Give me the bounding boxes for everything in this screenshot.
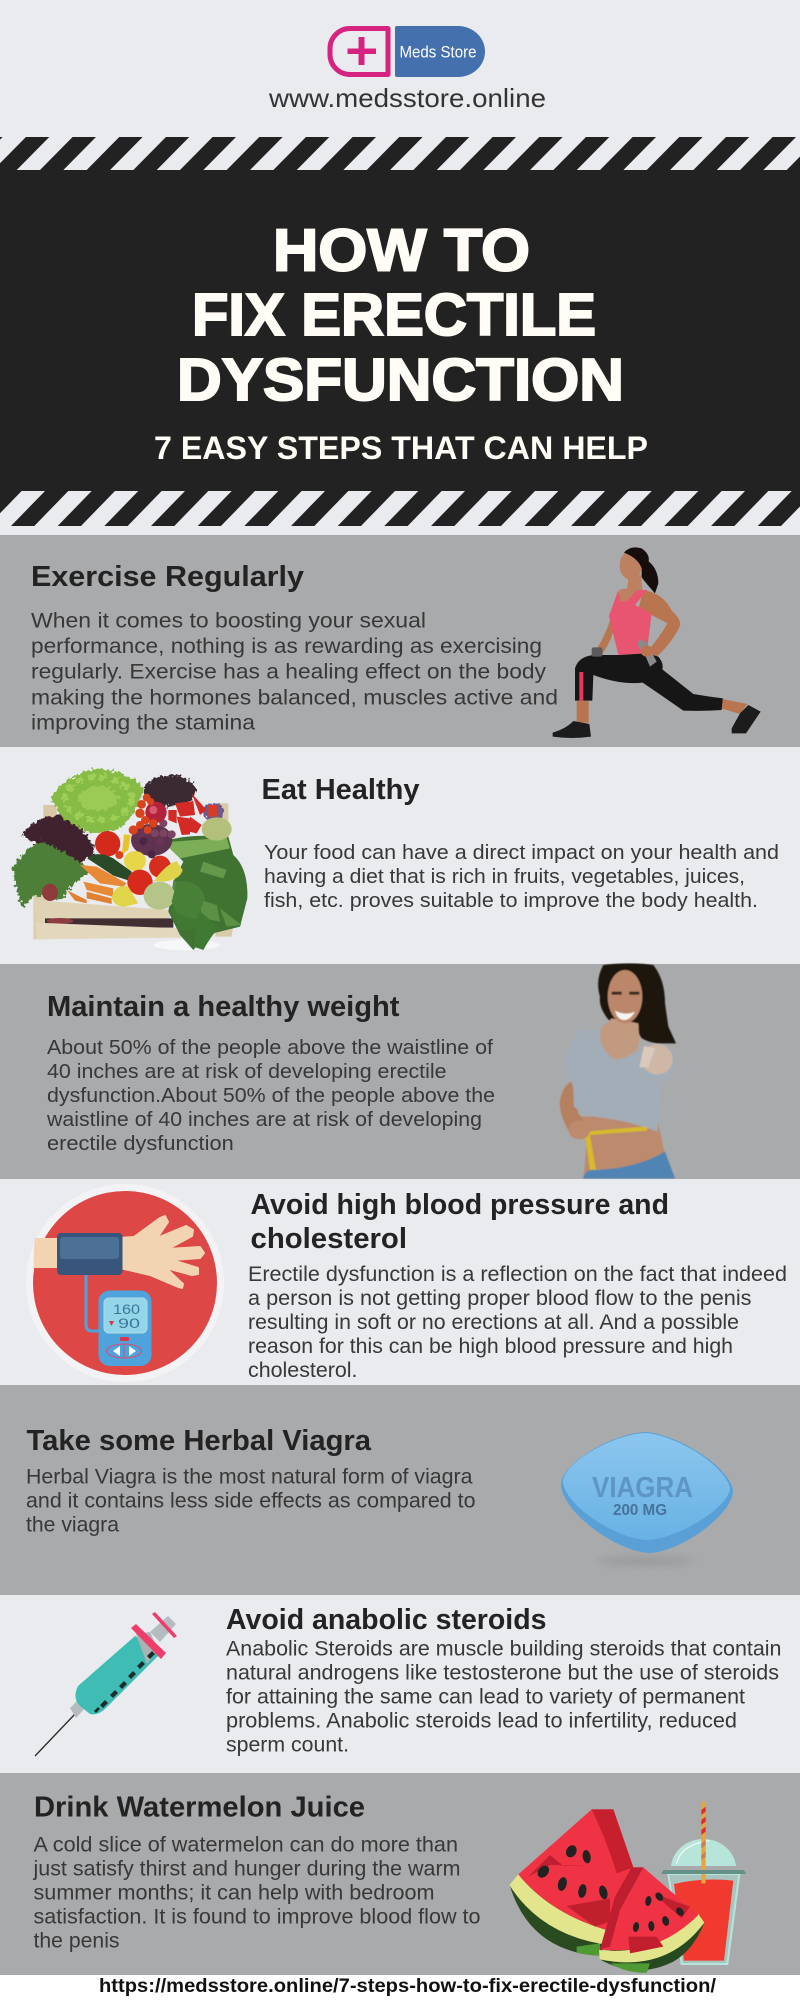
icon: blue pill: VIAGRA (592, 1472, 693, 1504)
heading: Maintain a healthy weight (47, 991, 400, 1023)
icon: crate of vegetables (13, 768, 247, 950)
body text: Herbal Viagra is the most natural form of viagra (26, 1466, 473, 1488)
heading: Avoid high blood pressure and (250, 1189, 669, 1221)
body text: summer months; it can help with bedroom (34, 1882, 434, 1904)
body text: Anabolic Steroids are muscle building steroids that contain (226, 1638, 782, 1660)
footer band (0, 1975, 800, 2000)
body text (46, 1037, 495, 1155)
body text: for attaining the same can lead to variety of permanent (226, 1686, 745, 1708)
icon: syringe (35, 1612, 177, 1756)
body text: and it contains less side effects as compared to (26, 1490, 476, 1512)
body text (31, 610, 558, 734)
panel: avoid anabolic steroids (35, 1604, 782, 1756)
body text: a person is not getting proper blood flow to the penis (248, 1287, 752, 1310)
icon: blood pressure monitor: 160 (113, 1301, 140, 1317)
body text: just satisfy thirst and hunger during the warm (32, 1858, 461, 1880)
subtitle: 7 EASY STEPS THAT CAN HELP (154, 430, 648, 466)
heading: Eat Healthy (262, 774, 420, 806)
body text: natural androgens like testosterone but the use of steroids (226, 1662, 779, 1684)
heading: Drink Watermelon Juice (34, 1792, 365, 1824)
body text: the penis (34, 1930, 119, 1952)
body text: resulting in soft or no erections at all. And a possible (248, 1311, 739, 1334)
panel: avoid high blood pressure and cholesterol (26, 1184, 787, 1382)
body text: the viagra (26, 1514, 119, 1536)
body text: dysfunction.About 50% of the people above the (47, 1085, 495, 1107)
body text (226, 1638, 782, 1756)
panel: drink watermelon juice (0, 1773, 800, 1975)
body text: cholesterol. (248, 1359, 358, 1382)
title line: dysfunction: DYSFUNCTION (177, 347, 624, 413)
body text: fish, etc. proves suitable to improve the body health. (264, 890, 758, 912)
body text: Erectile dysfunction is a reflection on the fact that indeed (248, 1263, 787, 1286)
body text: sperm count. (226, 1734, 349, 1756)
body text: waistline of 40 inches are at risk of developing (46, 1109, 482, 1131)
icon: woman measuring waist (560, 963, 677, 1178)
panel: maintain a healthy weight (0, 963, 800, 1179)
body text: having a diet that is rich in fruits, vegetables, juices, (264, 866, 745, 888)
body text: About 50% of the people above the waistline of (47, 1037, 493, 1059)
panel: eat healthy (13, 768, 779, 950)
body text: erectile dysfunction (47, 1133, 234, 1155)
body text: making the hormones balanced, muscles active and (31, 686, 558, 710)
body text: 40 inches are at risk of developing erectile (47, 1061, 446, 1083)
body text (26, 1466, 476, 1536)
icon: blue pill (561, 1432, 733, 1566)
title line: how to: HOW TO (273, 218, 530, 284)
icon: blue pill: 200 MG (613, 1502, 667, 1519)
heading: Avoid anabolic steroids (226, 1604, 546, 1636)
icon: blood pressure monitor: 90 (118, 1315, 140, 1331)
logo: Meds Store (330, 26, 485, 77)
icon: blood pressure monitor (26, 1184, 224, 1382)
body text: improving the stamina (31, 712, 255, 734)
body text: regularly. Exercise has a healing effect on the body (31, 660, 547, 684)
body text (264, 842, 779, 912)
body text: When it comes to boosting your sexual (31, 610, 426, 632)
body text: A cold slice of watermelon can do more than (34, 1834, 458, 1856)
icon: watermelon and juice cup (509, 1802, 746, 1973)
body text (32, 1834, 481, 1952)
title line: fix erectile: FIX ERECTILE (192, 282, 596, 348)
heading: Exercise Regularly (31, 561, 304, 593)
footer url: https://medsstore.online/7-steps-how-to-fix-erectile-dysfunction/ (99, 1976, 717, 1997)
body text: satisfaction. It is found to improve blood flow to (34, 1906, 480, 1928)
website url: www.medsstore.online (268, 83, 546, 113)
heading: Take some Herbal Viagra (26, 1425, 372, 1457)
heading: cholesterol (250, 1223, 407, 1255)
body text: Your food can have a direct impact on your health and (264, 842, 779, 864)
panel: exercise regularly (0, 535, 800, 747)
body text (248, 1263, 787, 1382)
body text: problems. Anabolic steroids lead to infertility, reduced (226, 1710, 737, 1732)
icon: woman exercising lunge (553, 547, 761, 738)
body text: performance, nothing is as rewarding as exercising (31, 635, 542, 658)
crate slats (33, 900, 233, 939)
logo: Meds Store: Meds Store (400, 42, 476, 62)
heading (250, 1189, 669, 1255)
body text: reason for this can be high blood pressure and high (248, 1335, 733, 1358)
panel: take some herbal viagra (0, 1385, 800, 1595)
title banner (0, 137, 800, 526)
